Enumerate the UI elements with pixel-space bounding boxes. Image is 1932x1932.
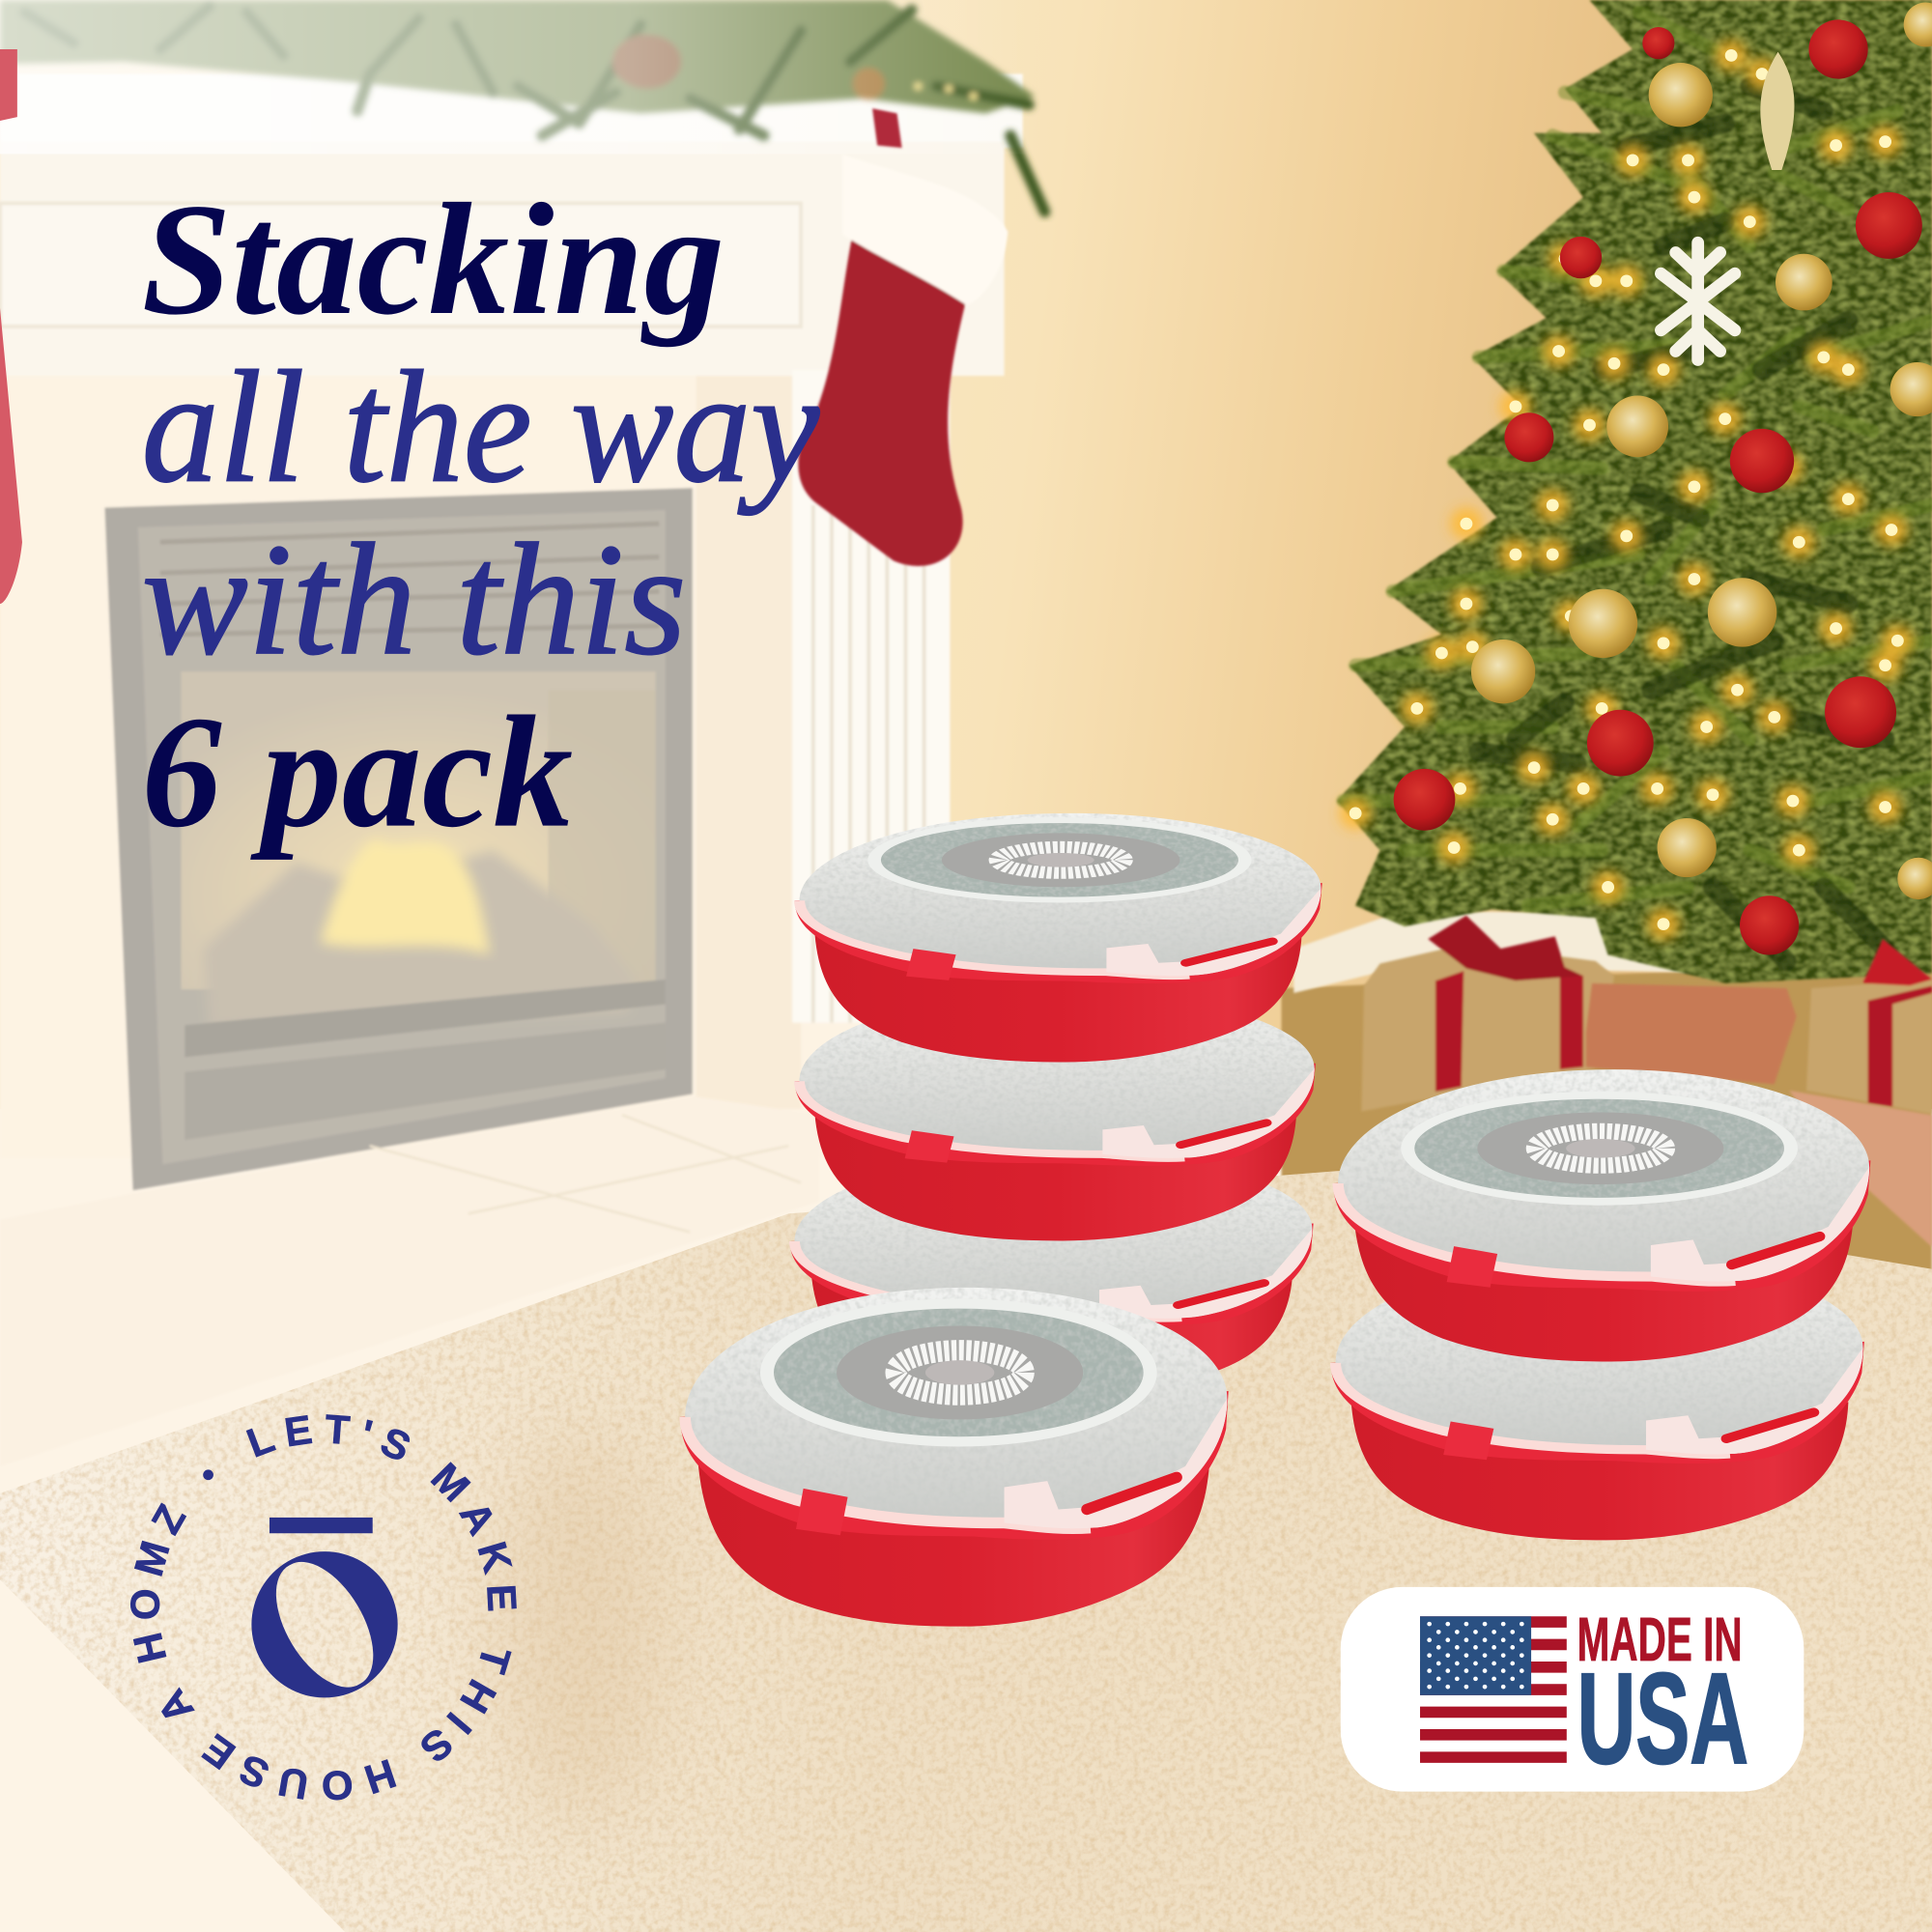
gold drop ornament	[1760, 52, 1794, 170]
fireplace firebox	[104, 488, 693, 1190]
area rug	[0, 1171, 1932, 1932]
title line: with this: with this	[142, 510, 686, 688]
storage box: stack top	[795, 813, 1322, 1062]
circular tagline: LET'S MAKE THIS HOUSE A HOMZ	[129, 1414, 517, 1801]
title line: all the way: all the way	[142, 337, 820, 515]
title line: Stacking: Stacking	[142, 170, 724, 348]
pine garland on mantel	[0, 0, 1045, 212]
hearth tiles	[0, 1096, 819, 1466]
fireplace mantel and surround	[0, 74, 1023, 1158]
brand badge	[129, 1414, 517, 1801]
wooden floor and baseboard	[0, 912, 1932, 1932]
text: MADE IN: MADE IN	[1577, 1605, 1743, 1674]
garland wash	[0, 0, 1047, 154]
storage box: right stack bottom	[1331, 1257, 1864, 1540]
badge background	[1341, 1587, 1804, 1792]
storage box: stack middle	[795, 992, 1316, 1240]
gold baubles	[1471, 3, 1932, 899]
Christmas tree	[1337, 0, 1932, 983]
tree foliage	[1337, 0, 1932, 983]
storage box: stack bottom	[790, 1152, 1314, 1399]
storage box: right stack top	[1333, 1069, 1870, 1361]
storage box: front	[680, 1288, 1229, 1627]
logo mark	[251, 1518, 398, 1697]
fireplace	[0, 74, 1023, 1466]
side stockings edge	[0, 49, 22, 604]
Made in USA badge	[1341, 1587, 1804, 1792]
red baubles	[1394, 19, 1922, 955]
badge dot	[203, 1469, 213, 1480]
Christmas stocking	[798, 108, 1008, 566]
wrapped gift boxes	[1361, 916, 1932, 1247]
string lights glow	[1355, 55, 1897, 924]
title line: 6 pack: 6 pack	[142, 683, 573, 861]
snowflake ornament	[1661, 242, 1735, 359]
American flag	[1420, 1616, 1567, 1757]
title	[142, 170, 820, 861]
text: USA: USA	[1577, 1647, 1748, 1791]
